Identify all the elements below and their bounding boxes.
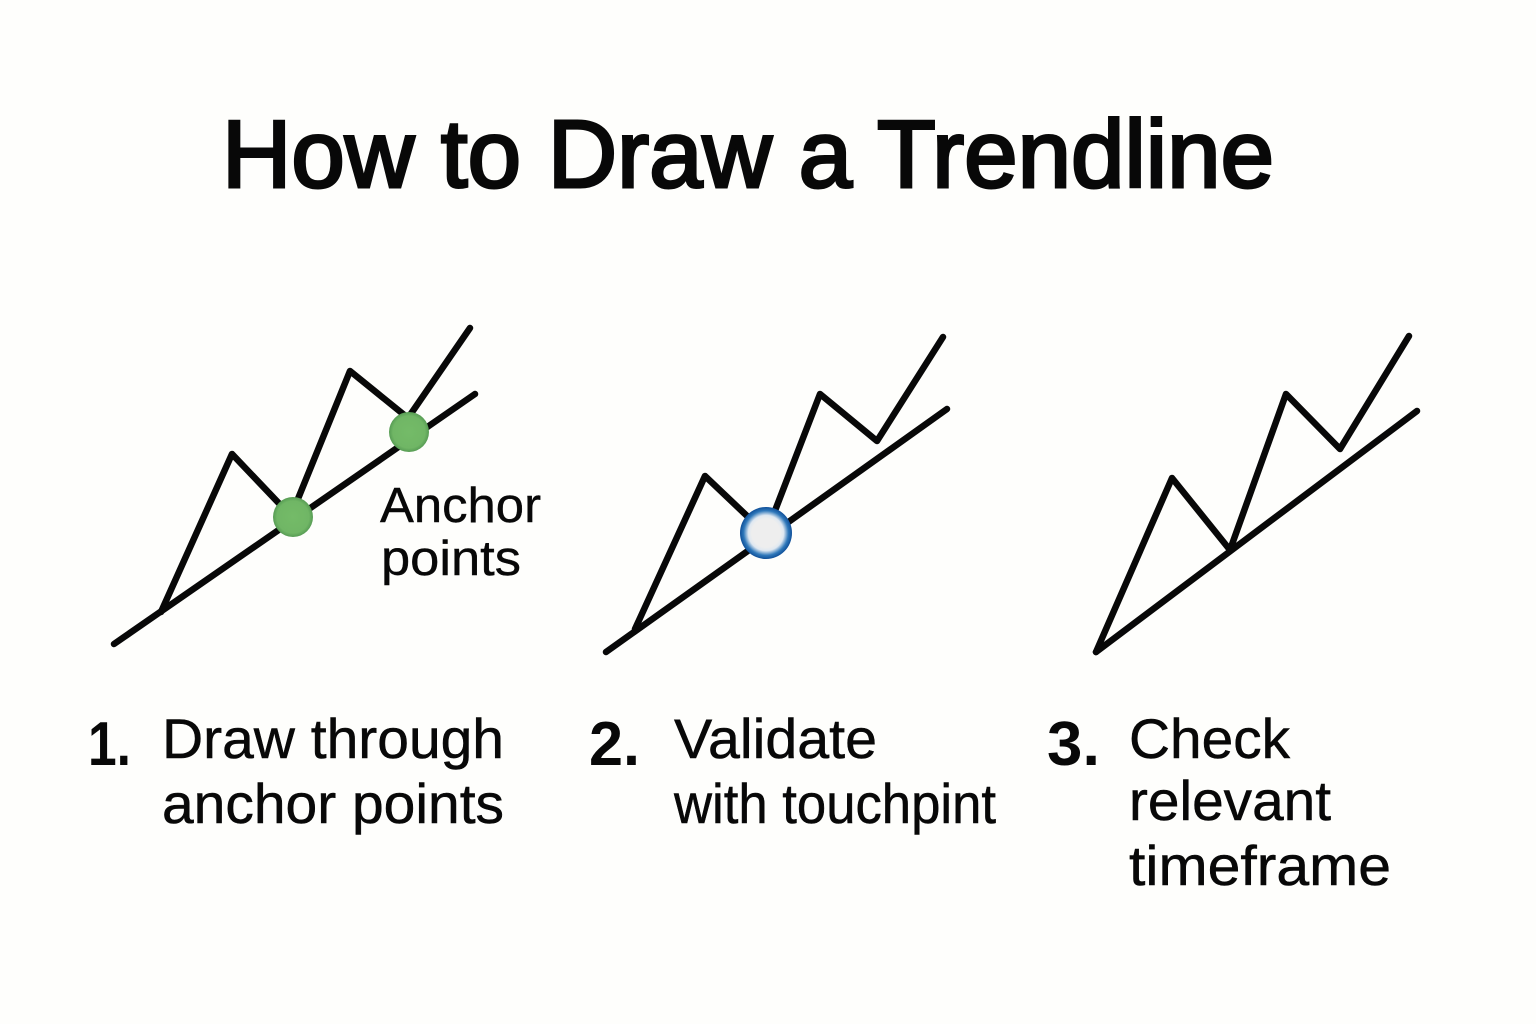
panel: step 2 [589, 337, 996, 835]
step 3 caption [1129, 707, 1391, 897]
anchor points label second line: points [381, 532, 521, 586]
chart: step 1 price line and trendline [114, 328, 475, 644]
step 1 number: 1. [88, 710, 131, 779]
step 2 caption [673, 707, 996, 835]
step 2 number: 2. [589, 710, 640, 779]
panel: step 3 [1047, 336, 1417, 897]
icon: touchpoint marker [740, 507, 792, 559]
step 1 caption [162, 707, 504, 835]
anchor points label: Anchor [380, 479, 541, 533]
step 3 number: 3. [1047, 710, 1100, 779]
chart: step 3 price line and trendline [1096, 336, 1417, 652]
panel: step 1 [88, 328, 541, 835]
step 1 caption: anchor points [162, 772, 504, 835]
step 3 caption: relevant [1129, 769, 1331, 832]
icon: anchor point lower [273, 497, 313, 537]
step 3 caption: timeframe [1129, 834, 1391, 897]
icon: anchor point upper [389, 412, 429, 452]
step 1 caption: Draw through [162, 707, 504, 770]
step 2 caption: with touchpint [673, 772, 996, 835]
step 2 caption: Validate [674, 707, 877, 770]
step 3 caption: Check [1129, 707, 1291, 770]
title: How to Draw a Trendline [222, 101, 1274, 208]
chart: step 2 price line and trendline [606, 337, 947, 652]
